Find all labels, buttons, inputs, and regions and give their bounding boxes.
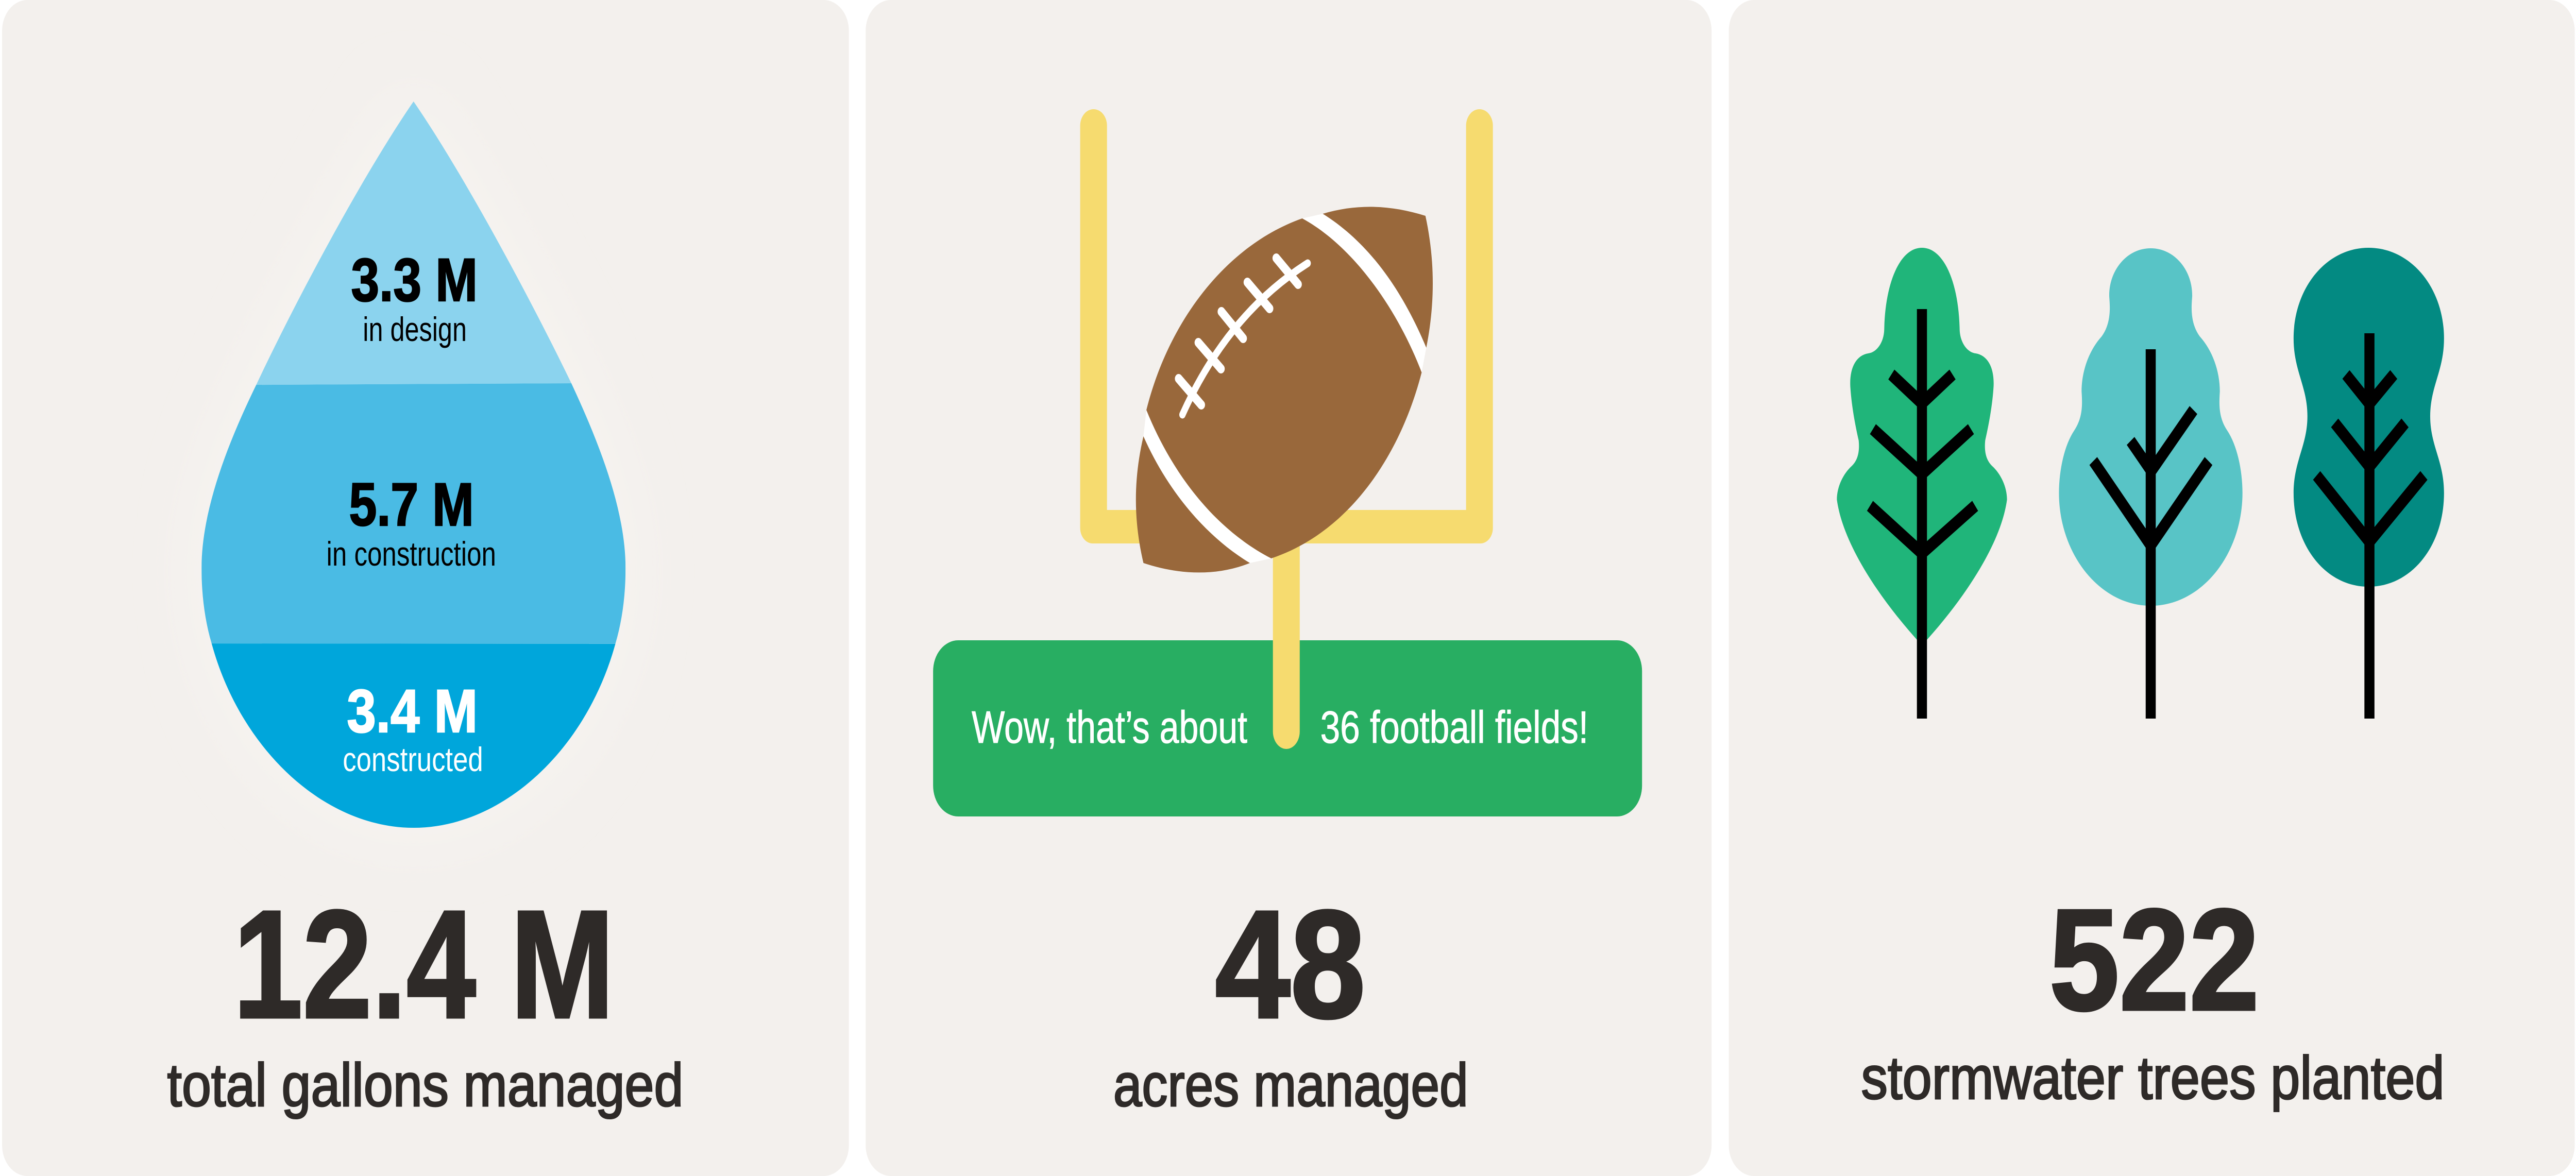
- icon: goal post: [1080, 109, 1493, 749]
- drop label: in design: in design: [363, 311, 467, 348]
- icon: light teal tree: [2059, 248, 2243, 719]
- callout: green banner: [933, 640, 1642, 816]
- big number: acres: 48: [1215, 878, 1365, 1050]
- drop label: in construction: in construction: [327, 535, 496, 573]
- big number: gallons: 12.4 M: [233, 878, 614, 1050]
- caption: gallons: total gallons managed: [167, 1051, 683, 1119]
- icon: football: [1136, 207, 1433, 572]
- football laces: [1179, 258, 1308, 415]
- callout: green banner: Wow, that’s about: [972, 702, 1247, 753]
- drop label: constructed: 3.4 M: [347, 677, 478, 745]
- icon: green oak tree: [1837, 248, 2007, 719]
- caption: acres: acres managed: [1113, 1051, 1468, 1119]
- drop label: in design: [351, 246, 478, 348]
- drop label: constructed: constructed: [343, 741, 483, 778]
- icon: water drop: [201, 101, 625, 828]
- drop label: in construction: [327, 471, 496, 573]
- drop label: in construction: 5.7 M: [349, 471, 474, 538]
- big number: trees: 522: [2049, 880, 2259, 1041]
- callout: green banner: 36 football fields!: [1320, 702, 1588, 753]
- panel: acres: [866, 0, 1711, 1176]
- drop label: constructed: [343, 677, 483, 778]
- caption: trees: stormwater trees planted: [1861, 1044, 2445, 1112]
- panel: gallons: [2, 0, 849, 1176]
- icon: dark teal tree: [2294, 248, 2444, 719]
- panel: trees: [1729, 0, 2575, 1176]
- drop label: in design: 3.3 M: [351, 246, 478, 314]
